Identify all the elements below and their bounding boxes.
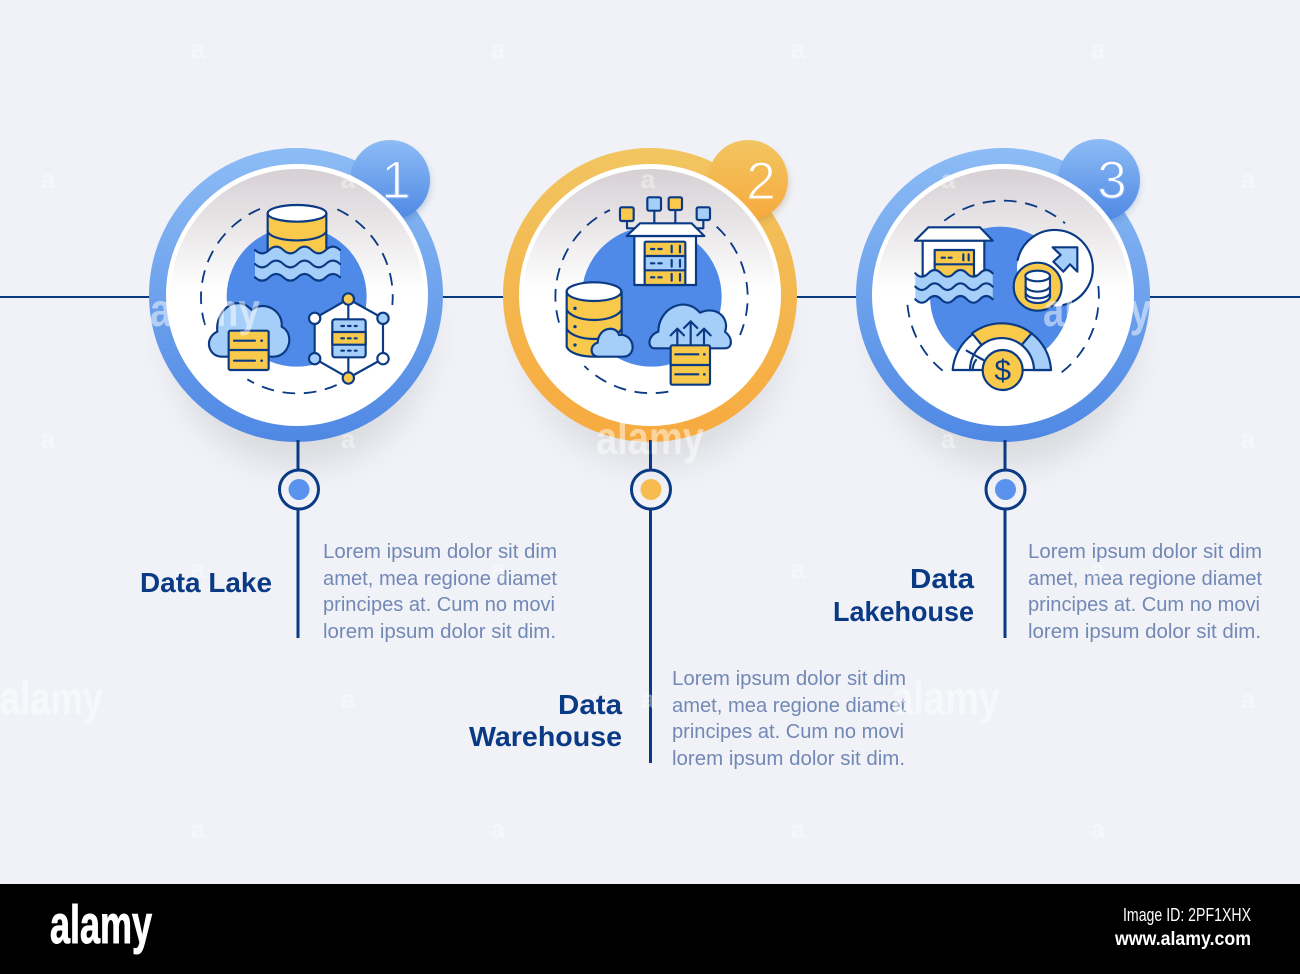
marker and stem 2 [632,440,670,763]
watermark overlay: alamy [596,412,704,464]
footer logo: alamy [50,895,152,955]
watermark overlay: a [1241,684,1256,714]
text block 3: principes at. Cum no movi [1028,594,1260,616]
watermark overlay: a [191,554,206,584]
marker and stem 3 [986,440,1025,638]
panel: step 1 data lake circle [149,140,443,464]
text block 1: principes at. Cum no movi [323,594,555,616]
icon group: data warehouse [555,197,748,393]
watermark overlay: a [41,164,56,194]
watermark overlay: a [341,424,356,454]
watermark overlay: a [191,814,206,844]
number badge 2: 2 [746,152,776,211]
inner white disc 2 [519,164,781,426]
heading: Data Lake: Data Lake [140,567,272,598]
watermark overlay: a [1091,34,1106,64]
text block 2: Lorem ipsum dolor sit dim [672,668,906,690]
footer url: www.alamy.com [1114,929,1251,950]
number badge 3: 3 [1097,151,1127,210]
text block 2: lorem ipsum dolor sit dim. [672,748,905,770]
watermark overlay: a [1241,424,1256,454]
watermark overlay: a [1091,554,1106,584]
watermark overlay: a [941,424,956,454]
watermark overlay: a [941,164,956,194]
number badge 1: 1 [381,151,411,210]
text block 1: amet, mea regione diamet [323,568,557,590]
inner white disc 3 [872,164,1134,426]
text block 2: principes at. Cum no movi [672,721,904,743]
outer ring 1 [149,148,443,442]
watermark overlay: a [191,34,206,64]
icon: cloud upload with server [649,305,731,385]
icon group: data lake [201,205,393,393]
panel: step 2 data warehouse circle [503,140,797,464]
text block 3: Lorem ipsum dolor sit dim [1028,541,1262,563]
icon group: data lakehouse [907,201,1099,390]
text block 2 [672,668,906,770]
icon: cloud with server [209,303,289,370]
panel: step 3 data lakehouse circle [856,139,1150,464]
footer bar [0,884,1300,974]
watermark overlay: alamy [1043,284,1151,336]
footer image id: Image ID: 2PF1XHX [1123,905,1251,925]
heading: Data Warehouse: Data [558,689,622,720]
heading: Data Lakehouse: Data [910,563,974,594]
watermark overlay: alamy [892,672,1000,724]
watermark overlay: alamy [150,284,260,336]
watermark overlay: a [341,684,356,714]
watermark overlay: a [491,554,506,584]
watermark overlay: alamy [0,672,103,724]
text block 1: lorem ipsum dolor sit dim. [323,621,556,643]
watermark overlay: a [791,814,806,844]
watermark overlay: a [641,164,656,194]
number badge 1 [350,140,430,222]
heading: Data Lakehouse: Lakehouse [833,596,974,627]
heading: Data Lakehouse [833,563,974,627]
watermark overlay: a [1091,814,1106,844]
text block 1: Lorem ipsum dolor sit dim [323,541,557,563]
watermark overlay: a [791,34,806,64]
watermark overlay: a [341,164,356,194]
text block 3: amet, mea regione diamet [1028,568,1262,590]
text block 3: lorem ipsum dolor sit dim. [1028,621,1261,643]
icon: warehouse with nodes [620,197,710,285]
watermark overlay: a [1241,164,1256,194]
icon: lakehouse building in water [915,227,993,303]
outer ring 2 [503,148,797,442]
watermark overlay: a [791,554,806,584]
icon: scaling storage [1014,230,1093,311]
icon: server network [309,293,389,384]
watermark overlay: a [41,424,56,454]
dollar sign: $ [994,355,1011,388]
watermark overlay: a [641,684,656,714]
icon: database with cloud [567,282,633,357]
watermark overlay: a [491,814,506,844]
text block 1 [323,541,557,643]
marker and stem 1 [280,440,318,638]
text block 3 [1028,541,1262,643]
heading: Data Warehouse: Warehouse [469,721,622,752]
heading: Data Warehouse [469,689,622,752]
timeline: horizontal connector [0,296,1300,298]
number badge 3 [1058,139,1140,222]
watermark overlay: a [491,34,506,64]
outer ring 3 [856,148,1150,442]
number badge 2 [708,140,788,222]
icon: lake cylinder [255,205,340,281]
icon: cost gauge [953,323,1051,390]
inner white disc 1 [166,164,428,426]
text block 2: amet, mea regione diamet [672,695,906,717]
